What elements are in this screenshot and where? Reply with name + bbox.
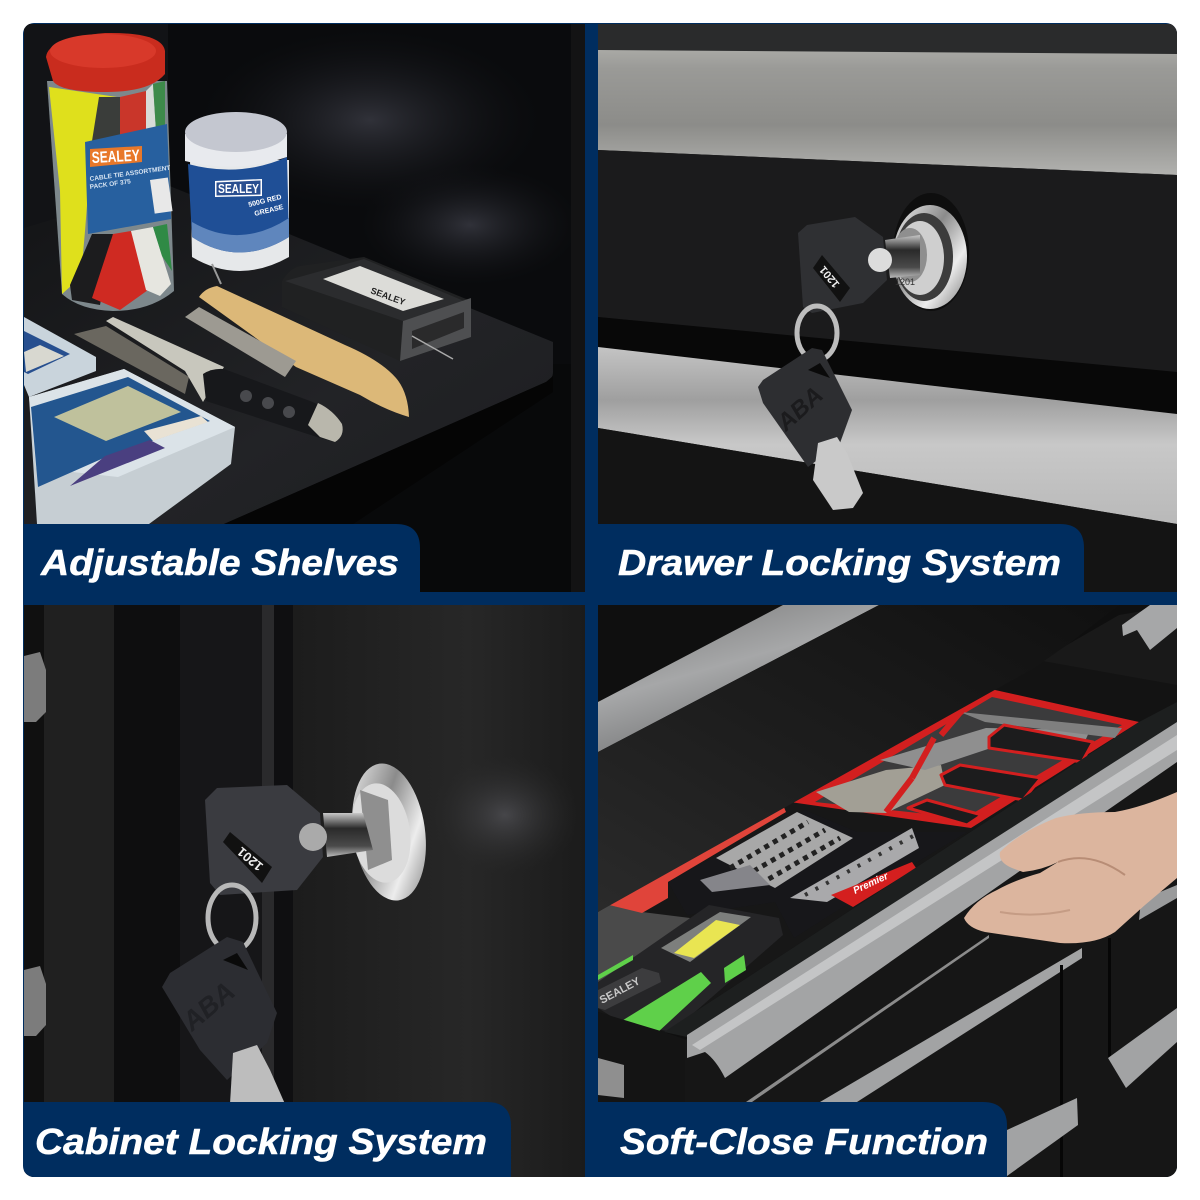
icon: drawer lock cylinder: 1201: [895, 277, 915, 287]
icon: drawer lock cylinder: [885, 193, 969, 311]
upper drawer front: [598, 150, 1177, 375]
grey drawer mat: [598, 906, 690, 982]
icon: cabinet lock cylinder: [323, 764, 426, 900]
icon: grease tub: GREASE: [254, 204, 284, 218]
label: drawer locking system: Drawer Locking System: [618, 542, 1061, 583]
icon: wooden wire brush: [185, 264, 409, 417]
icon: side hinges: [24, 652, 46, 1036]
lower silver handle: [598, 347, 1177, 524]
label: soft-close function: [598, 1102, 1007, 1177]
next drawer handle: [820, 948, 1082, 1102]
top right handle: [1122, 605, 1177, 650]
bottom handle: [1007, 1098, 1078, 1176]
icon: lower key: ABA: [176, 976, 241, 1037]
interior back wall: [986, 660, 1177, 722]
socket set tray: [668, 812, 919, 907]
icon: cable tie jar: SEALEY: [91, 147, 140, 167]
icon: hand: [964, 792, 1177, 943]
icon: upper key head: [798, 217, 892, 313]
icon: upper key head: 1201: [817, 263, 842, 290]
drawer interior floor: [598, 660, 1177, 1032]
drawer handle: [687, 722, 1177, 1078]
upper silver handle: [598, 50, 1177, 175]
label: cabinet locking system: Cabinet Locking System: [35, 1121, 487, 1162]
socket set tray: Premier: [852, 871, 891, 897]
label: adjustable shelves: [24, 524, 420, 592]
drawer latch: [598, 1058, 624, 1098]
panel: drawer locking system: [598, 24, 1177, 592]
icon: lower key: [758, 348, 863, 510]
icon: cable tie jar: PACK OF 375: [89, 178, 132, 191]
icon: upper key head: [205, 785, 327, 895]
icon: cable tie jar: [46, 33, 174, 311]
icon: cable tie jar: CABLE TIE ASSORTMENT: [89, 165, 171, 183]
panel: soft-close function: [598, 605, 1177, 1177]
drawer side: [598, 1012, 687, 1177]
lower right handle: [1108, 1008, 1177, 1088]
drawer lower front: [685, 722, 1177, 1177]
label: soft-close function: Soft-Close Function: [620, 1121, 988, 1162]
inspection lamp: SEALEY: [598, 975, 643, 1007]
upper drawer handle: [598, 605, 879, 752]
upper drawer front: [598, 605, 995, 912]
icon: plastic handled wire brush: [74, 317, 343, 442]
panel: cabinet locking system: [24, 605, 585, 1177]
red foam: [609, 805, 786, 913]
drawer rim: [664, 702, 1177, 1037]
cabinet door: [342, 605, 546, 1177]
icon: grease tub: 500G RED: [248, 194, 282, 209]
icon: small parts box: [24, 317, 96, 397]
lower seam: [746, 935, 989, 1102]
icon: upper key head: 1201: [234, 844, 266, 874]
icon: grease tub: [185, 112, 289, 271]
icon: lower key: [162, 937, 285, 1104]
icon: lower key: ABA: [771, 382, 829, 437]
icon: key ring: [208, 885, 256, 951]
label: drawer locking system: [598, 524, 1084, 592]
cabinet side above drawer: [1044, 612, 1177, 685]
icon: black pouch: SEALEY: [369, 285, 407, 307]
drawer gap: [598, 317, 1177, 414]
icon: key ring: [797, 306, 837, 360]
label: cabinet locking system: [24, 1102, 511, 1177]
shelf surface: [24, 185, 553, 524]
small handle behind hand: [1139, 885, 1177, 920]
icon: grease tub: SEALEY: [218, 181, 259, 196]
icon: washers box: [29, 369, 235, 524]
tool roll: [790, 688, 1139, 828]
icon: black pouch: [282, 257, 471, 361]
inspection lamp: [598, 905, 783, 1033]
label: adjustable shelves: Adjustable Shelves: [40, 542, 399, 583]
panel: adjustable shelves: [24, 24, 585, 592]
